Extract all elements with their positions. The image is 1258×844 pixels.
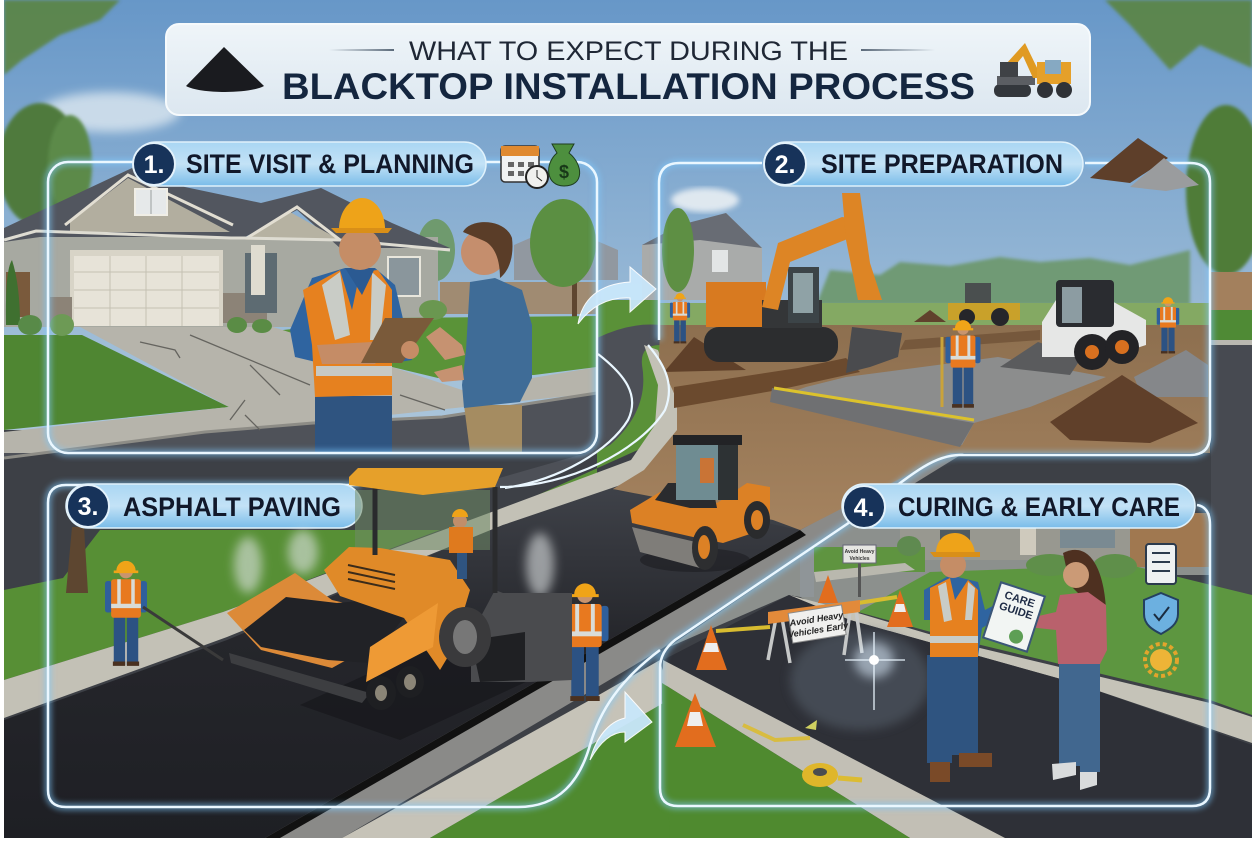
heading pill: step 4: 4. — [854, 494, 874, 522]
heading pill: step 4 — [842, 484, 1195, 528]
house — [4, 168, 450, 327]
heading pill: step 2 — [764, 142, 1083, 186]
steam — [234, 530, 554, 597]
icons: checklist shield sun — [1144, 544, 1178, 676]
post and small yard sign: Vehicles — [849, 556, 870, 562]
icon: asphalt pile — [186, 47, 264, 92]
panel borders — [48, 162, 1210, 807]
heading pill: step 4: CURING & EARLY CARE — [898, 492, 1180, 522]
icons: calendar clock money bag: $ — [559, 162, 569, 182]
lower sidewalk — [662, 660, 1005, 838]
lawn and driveway — [4, 300, 597, 458]
skid steer — [1000, 280, 1146, 375]
heading pill: step 1 — [133, 142, 486, 186]
rear paving worker — [561, 583, 609, 701]
care guide document — [983, 582, 1045, 652]
fresh driveway — [663, 595, 1252, 838]
title line two: BLACKTOP INSTALLATION PROCESS — [282, 66, 975, 107]
back house, fence and trees — [417, 199, 618, 340]
homeowner — [426, 222, 532, 452]
barrier with sign: Vehicles Early — [787, 620, 850, 640]
house strip and fence — [900, 513, 1210, 567]
glare — [845, 632, 905, 710]
yellow loader — [914, 283, 1020, 326]
heading pill: step 3 — [66, 484, 362, 528]
care guide document: CARE — [1003, 589, 1036, 610]
title line one: WHAT TO EXPECT DURING THE — [409, 36, 848, 66]
icon: excavator — [994, 43, 1072, 98]
tree trunk — [66, 527, 88, 593]
homeowner woman — [1028, 550, 1107, 790]
heading pill: step 2: SITE PREPARATION — [821, 149, 1063, 179]
contractor with clipboard — [290, 198, 434, 452]
icon: dirt and gravel piles — [1090, 138, 1199, 191]
heading pill: step 1: 1. — [144, 151, 164, 179]
traffic cones — [675, 575, 913, 747]
operator — [449, 509, 473, 579]
tree line and far grass — [660, 250, 1210, 325]
arrow: step 3 to step 4 — [590, 692, 652, 760]
panel: curing and early care scene — [662, 513, 1252, 838]
barrier with sign — [768, 600, 862, 663]
title banner — [166, 24, 1090, 115]
excavator — [704, 193, 902, 373]
lawn — [814, 536, 1252, 715]
heading pill: step 2: 2. — [775, 151, 795, 179]
panel: site visit and planning scene — [4, 168, 618, 458]
barrier with sign: Avoid Heavy — [788, 610, 845, 628]
background house — [642, 208, 762, 300]
road roller — [630, 435, 770, 572]
site workers — [670, 293, 1179, 408]
post and small yard sign — [800, 545, 876, 597]
arrow: step 1 to step 2 — [578, 267, 656, 324]
caution tape — [716, 597, 897, 631]
contractor with care guide — [924, 533, 1012, 782]
heading pill: step 3: 3. — [78, 493, 98, 521]
tape measure — [743, 720, 862, 787]
heading pill: step 3: ASPHALT PAVING — [123, 492, 341, 522]
heading pill: step 1: SITE VISIT & PLANNING — [186, 149, 474, 179]
paving crew with shovel — [105, 561, 223, 666]
gravel and dirt piles right — [1050, 350, 1208, 443]
panel: site preparation scene — [630, 188, 1210, 572]
icons: calendar clock money bag — [501, 144, 580, 188]
post and small yard sign: Avoid Heavy — [845, 549, 875, 555]
trench and dirt piles — [664, 330, 1040, 408]
care guide document: GUIDE — [997, 600, 1034, 622]
curb sidewalk — [789, 595, 1252, 743]
gravel base with tape — [770, 357, 1106, 447]
panel: asphalt paving scene — [66, 527, 609, 701]
paving machine — [227, 468, 572, 740]
